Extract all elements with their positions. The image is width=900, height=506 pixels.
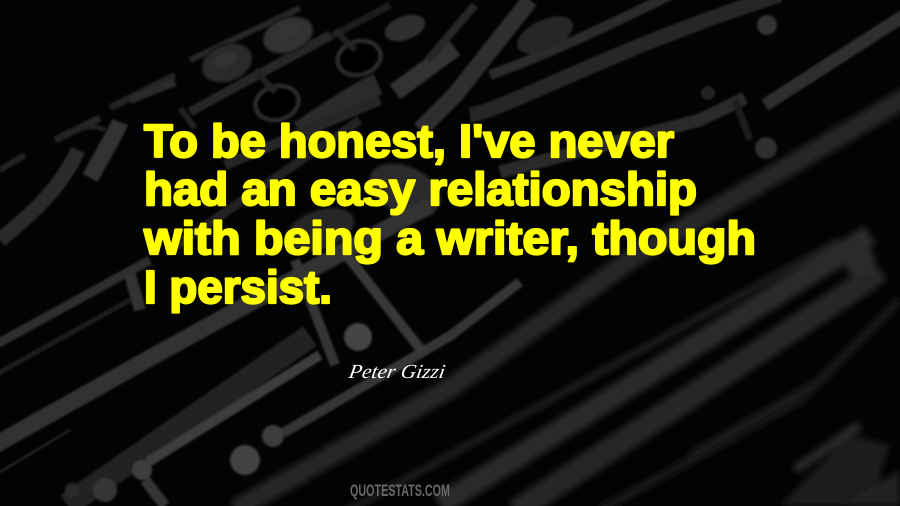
top-left key cluster: [55, 5, 429, 140]
author name: Peter Gizzi: [346, 361, 447, 383]
quote line 1: To be honest, I've never: [144, 115, 674, 167]
watermark: QUOTESTATS.COM: [350, 481, 450, 500]
quote text: [143, 115, 756, 313]
background photo: soft lower right tubes: [235, 95, 900, 506]
left side curved keys: [0, 150, 78, 240]
quote line 2: had an easy relationship: [144, 163, 697, 215]
lower left rods: [0, 205, 520, 506]
oval plates under the quote: [360, 152, 450, 228]
long curved key plates: [300, 84, 378, 132]
upper right rods: [470, 0, 900, 172]
quote line 3: with being a writer, though: [143, 212, 756, 264]
quote line 4: I persist.: [144, 261, 332, 313]
